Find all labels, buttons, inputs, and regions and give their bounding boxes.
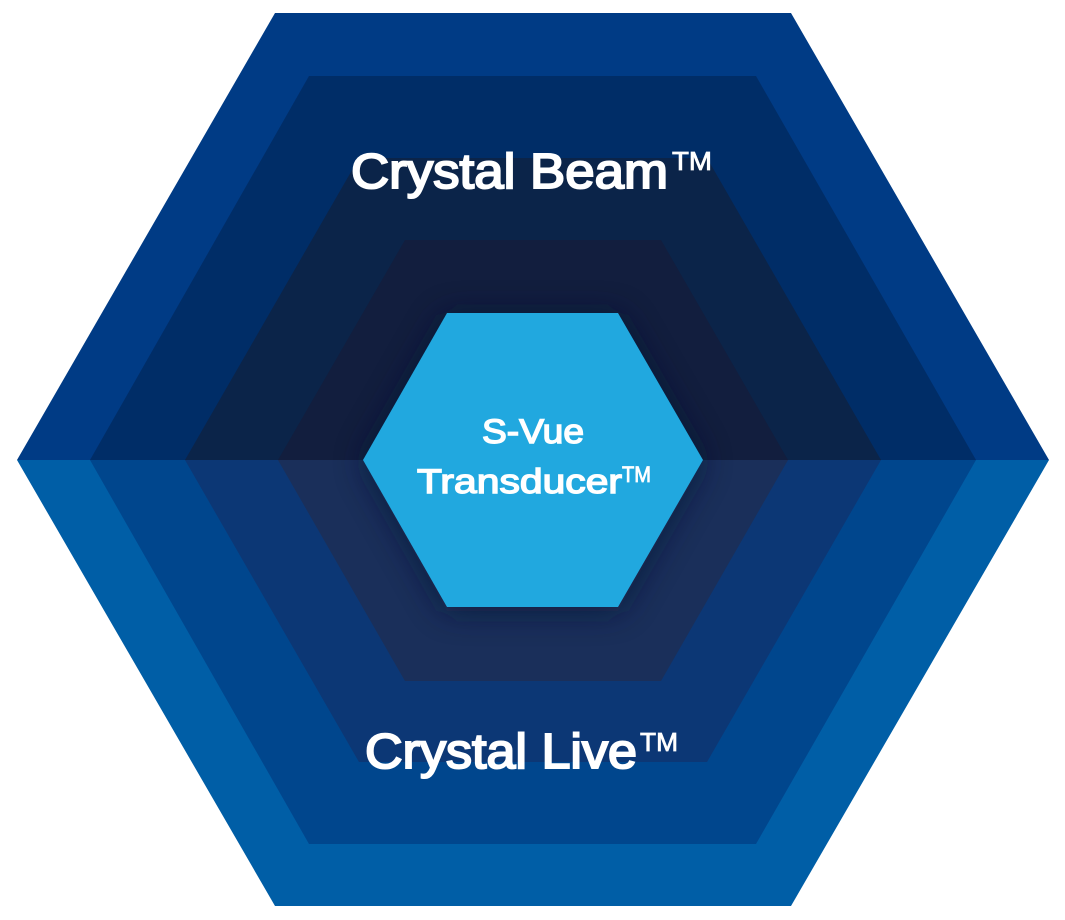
heading: Crystal Live: TM <box>640 727 678 757</box>
label: S-Vue Transducer: S-Vue <box>482 413 584 451</box>
label: S-Vue Transducer <box>417 413 651 501</box>
label: S-Vue Transducer: TM <box>622 462 651 487</box>
third hexagon layer <box>185 158 881 762</box>
heading: Crystal Beam: TM <box>672 146 712 176</box>
heading: Crystal Beam: Crystal Beam <box>351 145 668 199</box>
fourth hexagon layer <box>278 240 788 681</box>
label: S-Vue Transducer: Transducer <box>417 463 622 501</box>
second hexagon layer <box>90 76 976 844</box>
heading: Crystal Live: Crystal Live <box>365 725 637 779</box>
core hexagon <box>363 313 703 607</box>
core hexagon shadow <box>363 315 703 611</box>
